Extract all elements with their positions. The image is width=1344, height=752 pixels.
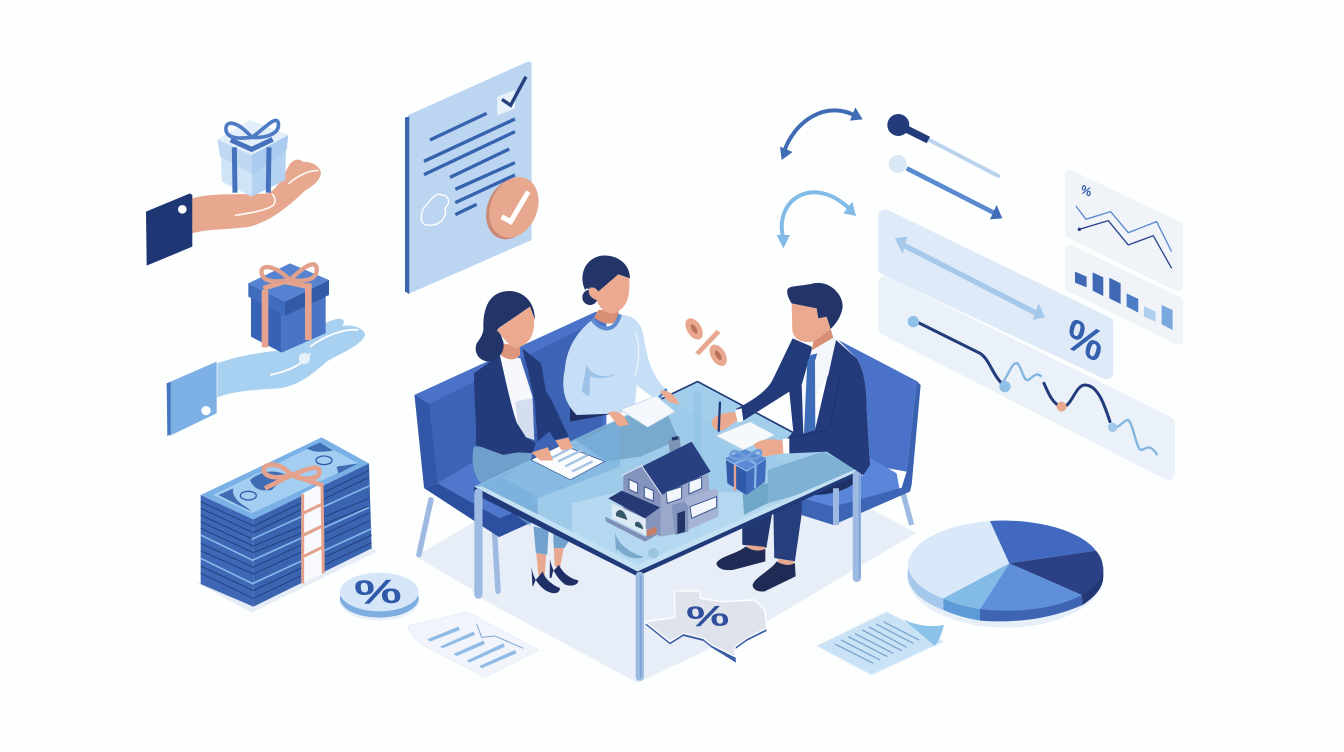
person: woman in light sweater	[563, 256, 667, 422]
map of Texas with percent: %	[685, 600, 730, 633]
icon: hand with light gift	[146, 120, 321, 266]
curved arrow dark	[780, 107, 863, 160]
central scene group behind glass	[414, 312, 916, 683]
icon: hand with blue gift	[167, 263, 365, 436]
slider arrow	[889, 155, 1002, 219]
paper right	[716, 422, 775, 450]
panel: line chart	[1070, 175, 1178, 287]
bottom right group	[645, 521, 1104, 675]
icon: floating percent	[682, 315, 730, 369]
floor shadow	[415, 403, 916, 683]
report sheet with bars	[407, 612, 539, 677]
stack shadow	[195, 547, 377, 613]
table back leg	[687, 392, 709, 536]
panel: line chart: %	[1079, 182, 1093, 200]
icon: percent coin: %	[353, 573, 403, 612]
glass table group	[474, 315, 861, 677]
chair right	[802, 340, 921, 525]
left hands and document group	[146, 61, 547, 436]
glass table	[474, 382, 861, 576]
hands and pen	[712, 402, 789, 457]
document with approval check	[405, 61, 547, 294]
person: man upper body	[712, 283, 870, 475]
suit and shirt	[736, 337, 870, 475]
money stack and percent coin group	[195, 437, 539, 677]
slider dark	[887, 114, 998, 176]
icon: stack of banknotes	[201, 437, 372, 607]
panel: rate line	[885, 283, 1168, 473]
pie chart	[907, 521, 1104, 628]
sofa left	[414, 312, 606, 591]
document sheet	[817, 612, 944, 675]
heads and sweater group	[476, 256, 667, 422]
panel: percent range: %	[1060, 309, 1110, 372]
house and table objects group	[605, 436, 767, 559]
panel: percent range	[885, 216, 1110, 373]
panel: bar chart	[1070, 250, 1178, 340]
right panels group	[777, 107, 1178, 473]
table front legs	[478, 475, 860, 677]
shoe reflection on glass	[615, 532, 659, 559]
head: man	[787, 283, 843, 350]
person: woman with jacket body	[473, 348, 578, 593]
curved arrow light	[777, 192, 856, 248]
paper left	[531, 445, 605, 480]
arms of the women	[476, 383, 679, 460]
head: woman with jacket	[476, 291, 535, 362]
person: man legs	[716, 496, 804, 592]
gift on table	[725, 449, 767, 495]
paper centre	[620, 396, 675, 427]
icon: percent coin	[339, 573, 419, 621]
house model	[605, 436, 718, 542]
map of Texas with percent	[645, 591, 767, 663]
